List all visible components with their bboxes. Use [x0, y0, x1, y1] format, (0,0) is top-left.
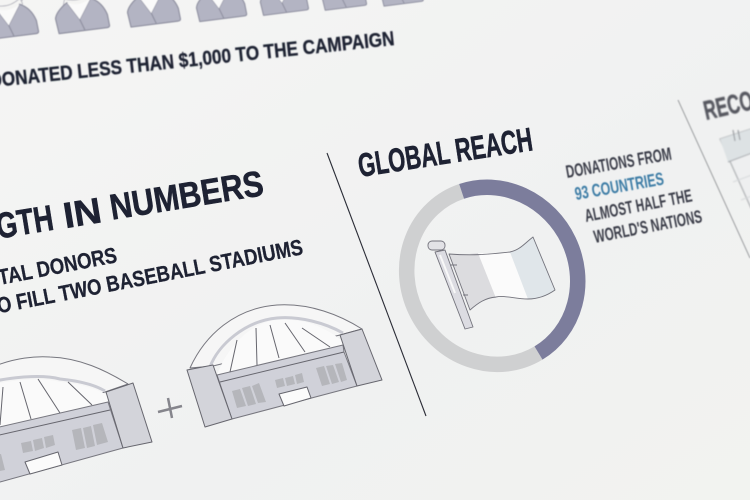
icon: plus sign	[158, 398, 182, 418]
icon: person 3	[123, 0, 181, 27]
icon: person 5	[256, 0, 309, 16]
icon: calendar (partly cut off)	[720, 126, 750, 208]
text block: donations from 93 countries: DONATIONS FROM	[564, 144, 673, 182]
heading: strength in numbers: IN	[60, 189, 104, 236]
row of donor person icons	[0, 0, 424, 40]
icon: person 7	[377, 0, 424, 6]
heading: strength in numbers	[0, 162, 266, 261]
heading: strength in numbers: NUMBERS	[107, 162, 266, 228]
caption: donated less than $1,000: DONATED LESS THAN $1,000 TO THE CAMPAIGN	[0, 28, 396, 93]
text block: donations from 93 countries	[564, 144, 704, 247]
icon: person 6	[318, 0, 367, 10]
icon: flag	[428, 237, 555, 329]
icon: person 2	[51, 0, 110, 34]
text block: donations from 93 countries: 93 COUNTRIES	[573, 169, 665, 204]
icon: left stadium	[0, 357, 152, 483]
icon: person 4	[192, 0, 247, 22]
icon: person 1	[0, 0, 39, 40]
heading: global reach: GLOBAL REACH	[355, 120, 535, 184]
text block: donations from 93 countries: ALMOST HALF THE	[583, 185, 694, 226]
icon: right stadium	[187, 305, 382, 427]
donut chart: 93 countries share	[407, 187, 578, 364]
